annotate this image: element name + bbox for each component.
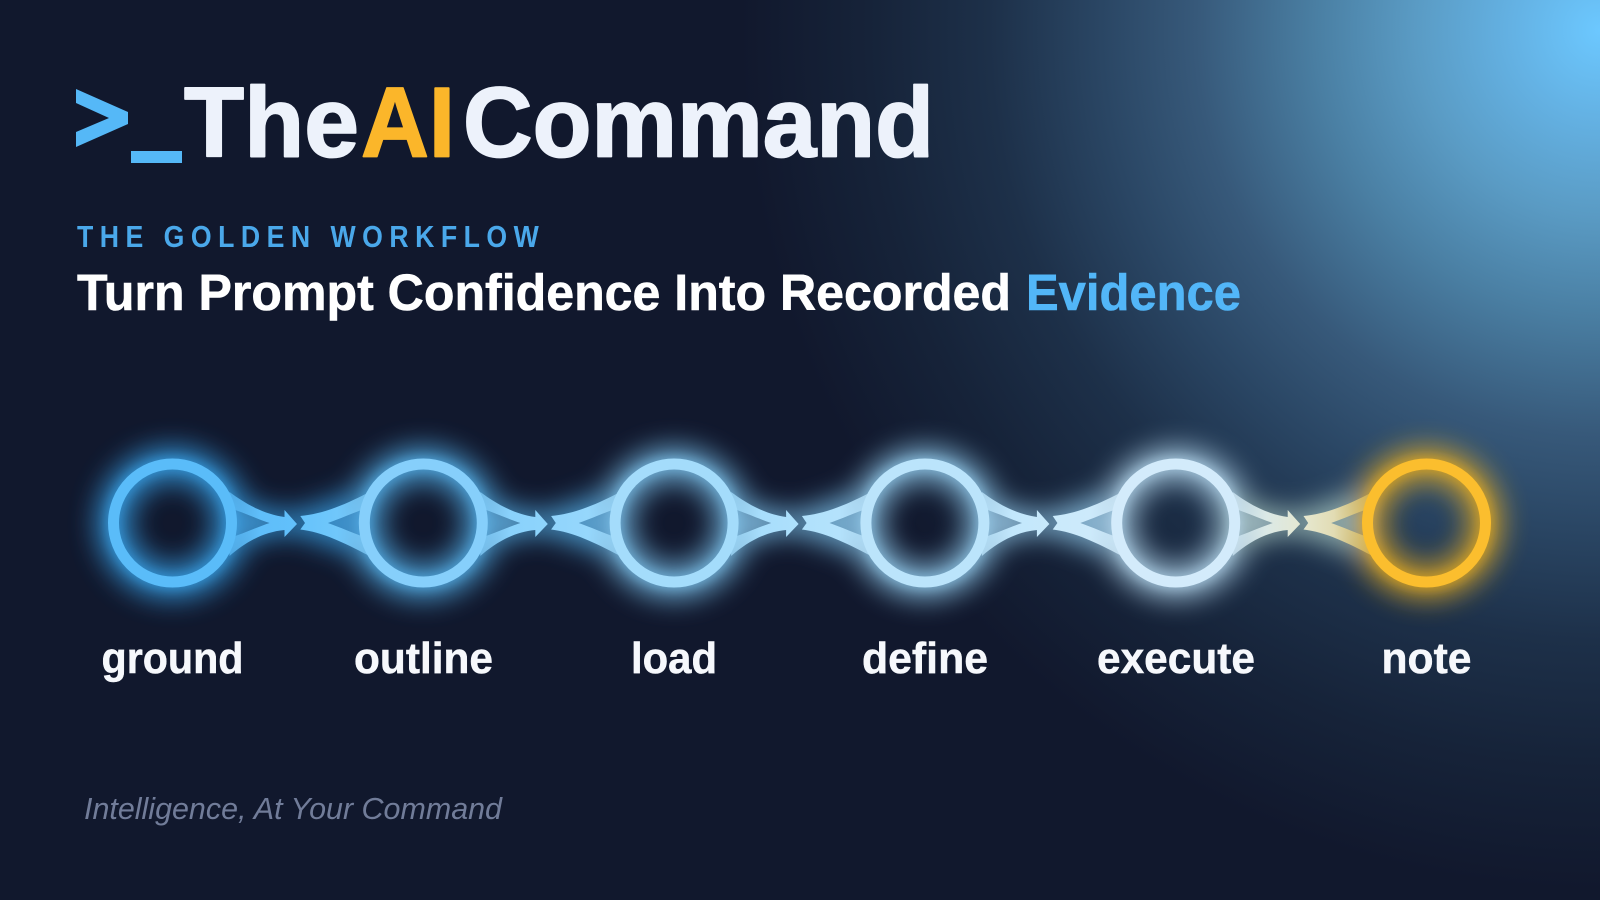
label: load: load [631,634,717,683]
label: execute: execute [1097,634,1255,683]
node: execute [1117,464,1235,582]
arrow: load to define [731,492,869,556]
node: ground [114,464,232,582]
arrow: ground to outline [230,492,368,556]
wordmark: The [184,66,359,178]
wordmark [184,66,934,178]
icon: terminal prompt [76,89,182,163]
arrow: define to execute [982,492,1120,556]
node: note [1368,464,1486,582]
label: ground: ground [102,634,244,683]
arrow: outline to load [480,492,618,556]
label: note: note [1382,634,1472,683]
label: outline: outline [354,634,493,683]
node: outline [364,464,482,582]
headline: Evidence [1026,264,1241,321]
step labels [102,634,1472,683]
node: define [866,464,984,582]
workflow chain [114,464,1486,582]
wordmark: AI [361,66,455,178]
wordmark: Command [463,66,934,178]
workflow glow [114,464,1486,582]
tagline: Intelligence, At Your Command [84,791,504,826]
arrow: execute to note [1233,492,1371,556]
headline: Turn Prompt Confidence Into Recorded [77,264,1011,321]
eyebrow heading: THE GOLDEN WORKFLOW [77,220,539,255]
label: define: define [862,634,988,683]
logo: prompt icon and wordmark [76,66,934,178]
node: load [615,464,733,582]
